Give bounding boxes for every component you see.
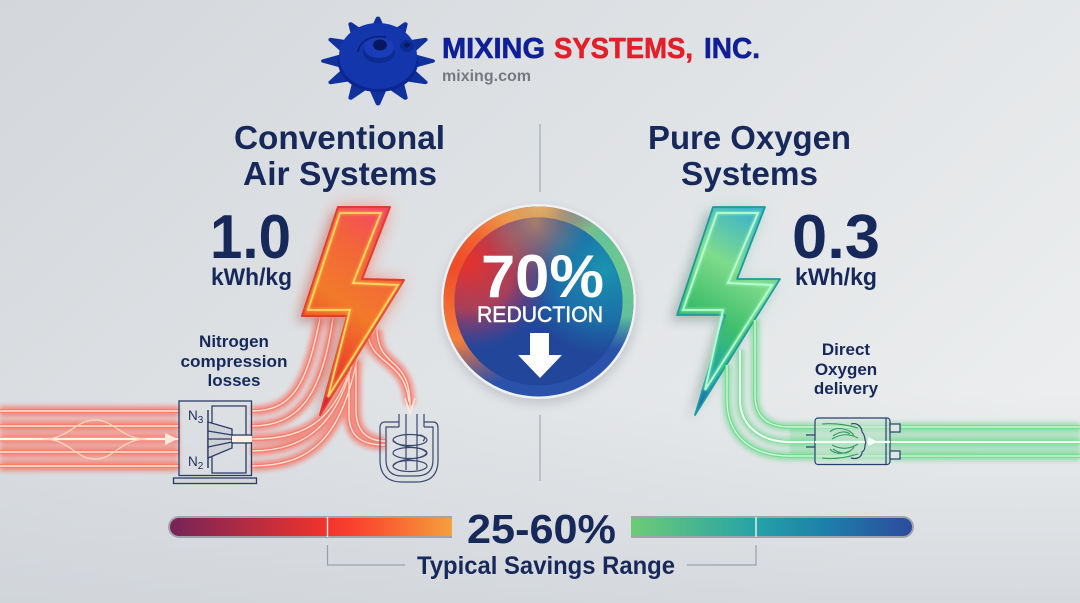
metric: conventional energy use: kWh/kg xyxy=(211,264,292,291)
badge: 70% reduction xyxy=(441,204,637,404)
savings caption: Typical Savings Range xyxy=(417,552,675,580)
savings bar: right xyxy=(631,516,914,538)
logo url: mixing.com xyxy=(442,68,531,85)
label: direct oxygen delivery xyxy=(814,340,879,398)
badge label: REDUCTION xyxy=(477,302,603,327)
label: direct oxygen delivery: Oxygen xyxy=(815,360,877,379)
icon: nitrogen compressor: N xyxy=(188,454,198,469)
logo wordmark: SYSTEMS, xyxy=(554,33,693,65)
logo wordmark xyxy=(442,33,760,65)
heading: pure oxygen systems: Systems xyxy=(681,155,818,192)
icon: nitrogen compressor: 3 xyxy=(198,415,204,426)
logo wordmark: MIXING xyxy=(442,33,545,65)
badge value: 70% xyxy=(481,243,604,310)
metric: pure oxygen energy use: kWh/kg xyxy=(795,264,877,291)
icon: nitrogen compressor: 2 xyxy=(198,461,204,472)
label: nitrogen compression losses: losses xyxy=(208,371,260,390)
heading: conventional air systems xyxy=(234,119,445,192)
icon: nitrogen compressor: N xyxy=(188,408,198,423)
metric: conventional energy use: 1.0 xyxy=(210,203,291,272)
heading: conventional air systems: Conventional xyxy=(234,119,445,156)
label: nitrogen compression losses: compression xyxy=(180,352,288,371)
icon: down arrow xyxy=(518,333,562,378)
heading: pure oxygen systems xyxy=(648,119,851,192)
logo: Mixing Systems gear xyxy=(321,17,435,105)
icon: oxygen delivery device xyxy=(806,418,900,465)
label: nitrogen compression losses xyxy=(180,332,288,390)
green energy flow pipes xyxy=(727,320,1080,458)
range bracket xyxy=(328,545,756,565)
label: direct oxygen delivery: delivery xyxy=(814,379,879,398)
metric: pure oxygen energy use: 0.3 xyxy=(792,203,880,272)
heading: conventional air systems: Air Systems xyxy=(243,155,437,192)
bolt: pure oxygen xyxy=(670,207,780,421)
savings bar: left xyxy=(168,516,452,538)
logo wordmark: INC. xyxy=(704,33,760,65)
divider: center top xyxy=(539,124,541,192)
heading: pure oxygen systems: Pure Oxygen xyxy=(648,119,851,156)
savings value: 25-60% xyxy=(467,506,616,552)
icon: nitrogen compressor xyxy=(174,401,256,484)
divider: center bottom xyxy=(539,415,541,481)
label: nitrogen compression losses: Nitrogen xyxy=(199,332,269,351)
bolt: conventional xyxy=(296,207,404,421)
label: direct oxygen delivery: Direct xyxy=(822,340,870,359)
icon: mixing tank xyxy=(380,414,438,482)
red energy flow pipes xyxy=(0,318,415,469)
